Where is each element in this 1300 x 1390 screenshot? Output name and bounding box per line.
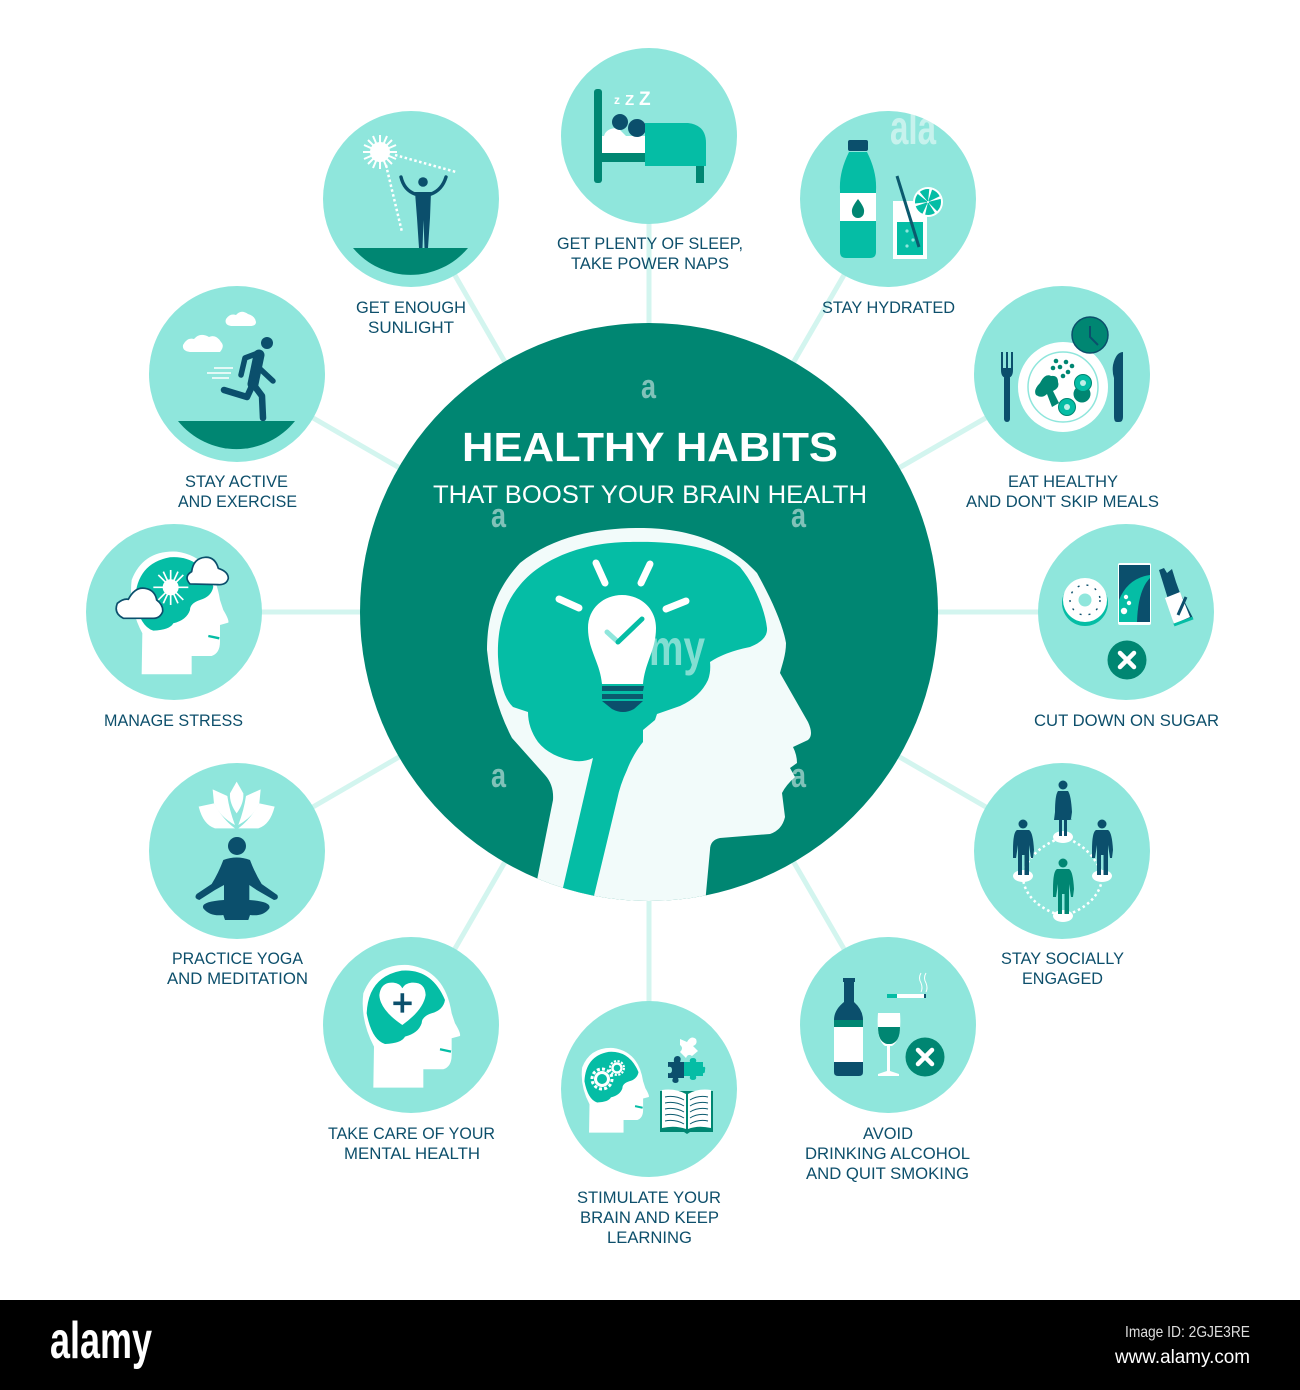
label	[328, 1124, 495, 1163]
panel: manage stress	[86, 524, 262, 730]
label: EAT HEALTHY	[1008, 472, 1118, 491]
illustration: head profile with brain	[487, 528, 811, 915]
watermark letters: my	[649, 620, 705, 676]
label: STAY HYDRATED	[822, 298, 955, 317]
label: STAY ACTIVE	[185, 472, 288, 491]
watermark letters: a	[491, 497, 507, 535]
label: SUNLIGHT	[368, 318, 454, 337]
icon: bed: Z	[625, 92, 634, 109]
panel: keep learning	[561, 1001, 737, 1247]
label: GET ENOUGH	[356, 298, 466, 317]
icon: person in the sun	[353, 135, 468, 275]
icon: head with clouds and sun	[116, 552, 228, 674]
panel: cut sugar	[1034, 524, 1219, 730]
footer url: www.alamy.com	[1114, 1347, 1250, 1368]
watermark letters	[491, 102, 936, 795]
label: AND EXERCISE	[178, 492, 297, 511]
footer bar	[0, 1300, 1300, 1390]
footer logo: alamy	[50, 1312, 152, 1370]
label	[167, 949, 308, 988]
label: MANAGE STRESS	[104, 711, 243, 730]
panel: central circle	[360, 323, 938, 915]
icon: head with gears, puzzle and book	[582, 1038, 713, 1134]
label	[1001, 949, 1124, 988]
label: AND DON'T SKIP MEALS	[966, 492, 1159, 511]
panel: sleep	[557, 48, 743, 273]
label: MENTAL HEALTH	[344, 1144, 480, 1163]
icon: bed: Z	[639, 89, 651, 110]
label	[577, 1188, 721, 1247]
title: HEALTHY HABITS	[462, 424, 838, 470]
label: CUT DOWN ON SUGAR	[1034, 711, 1219, 730]
label	[557, 234, 743, 273]
label: STIMULATE YOUR	[577, 1188, 721, 1207]
label: GET PLENTY OF SLEEP,	[557, 234, 743, 253]
label: AVOID	[863, 1124, 913, 1143]
icon: meditating figure and lotus	[195, 782, 278, 920]
icon: bottle, wine glass, cigarette	[834, 973, 944, 1076]
label: DRINKING ALCOHOL	[805, 1144, 970, 1163]
icon: light bulb	[559, 563, 686, 712]
brain and spinal cord	[498, 542, 767, 900]
watermark letters: a	[491, 757, 507, 795]
panel: sunlight	[323, 111, 499, 337]
label: AND QUIT SMOKING	[806, 1164, 969, 1183]
watermark letters: a	[641, 368, 657, 406]
label: STAY SOCIALLY	[1001, 949, 1124, 968]
label	[178, 472, 297, 511]
panel: yoga	[149, 763, 325, 988]
icon: bed	[594, 89, 706, 183]
icon: bottle and glass	[840, 140, 943, 259]
label: LEARNING	[607, 1228, 692, 1247]
subtitle: THAT BOOST YOUR BRAIN HEALTH	[433, 481, 867, 509]
icon: head with heart	[363, 965, 460, 1088]
label	[356, 298, 466, 337]
label	[805, 1124, 970, 1183]
head silhouette	[487, 528, 811, 915]
label: ENGAGED	[1022, 969, 1103, 988]
watermark letters: a	[791, 497, 807, 535]
icon: bed: z	[614, 93, 620, 107]
panel: eat healthy	[966, 286, 1159, 511]
label: TAKE POWER NAPS	[571, 254, 729, 273]
label: TAKE CARE OF YOUR	[328, 1124, 495, 1143]
panel: alcohol and smoking	[800, 937, 976, 1183]
watermark letters: ala	[890, 102, 936, 155]
panel: mental health	[323, 937, 499, 1163]
icon: runner	[178, 312, 295, 449]
icon: donut, soda can and bar	[1062, 563, 1193, 680]
panel: social	[974, 763, 1150, 988]
image id: Image ID: 2GJE3RE	[1125, 1324, 1250, 1341]
icon: plate, cutlery and clock	[1001, 317, 1123, 432]
label	[966, 472, 1159, 511]
panel: exercise	[149, 286, 325, 511]
icon: connected people	[1013, 780, 1113, 922]
label: PRACTICE YOGA	[172, 949, 304, 968]
watermark letters: a	[791, 757, 807, 795]
label: AND MEDITATION	[167, 969, 308, 988]
label: BRAIN AND KEEP	[580, 1208, 719, 1227]
panel: hydrated	[800, 111, 976, 317]
